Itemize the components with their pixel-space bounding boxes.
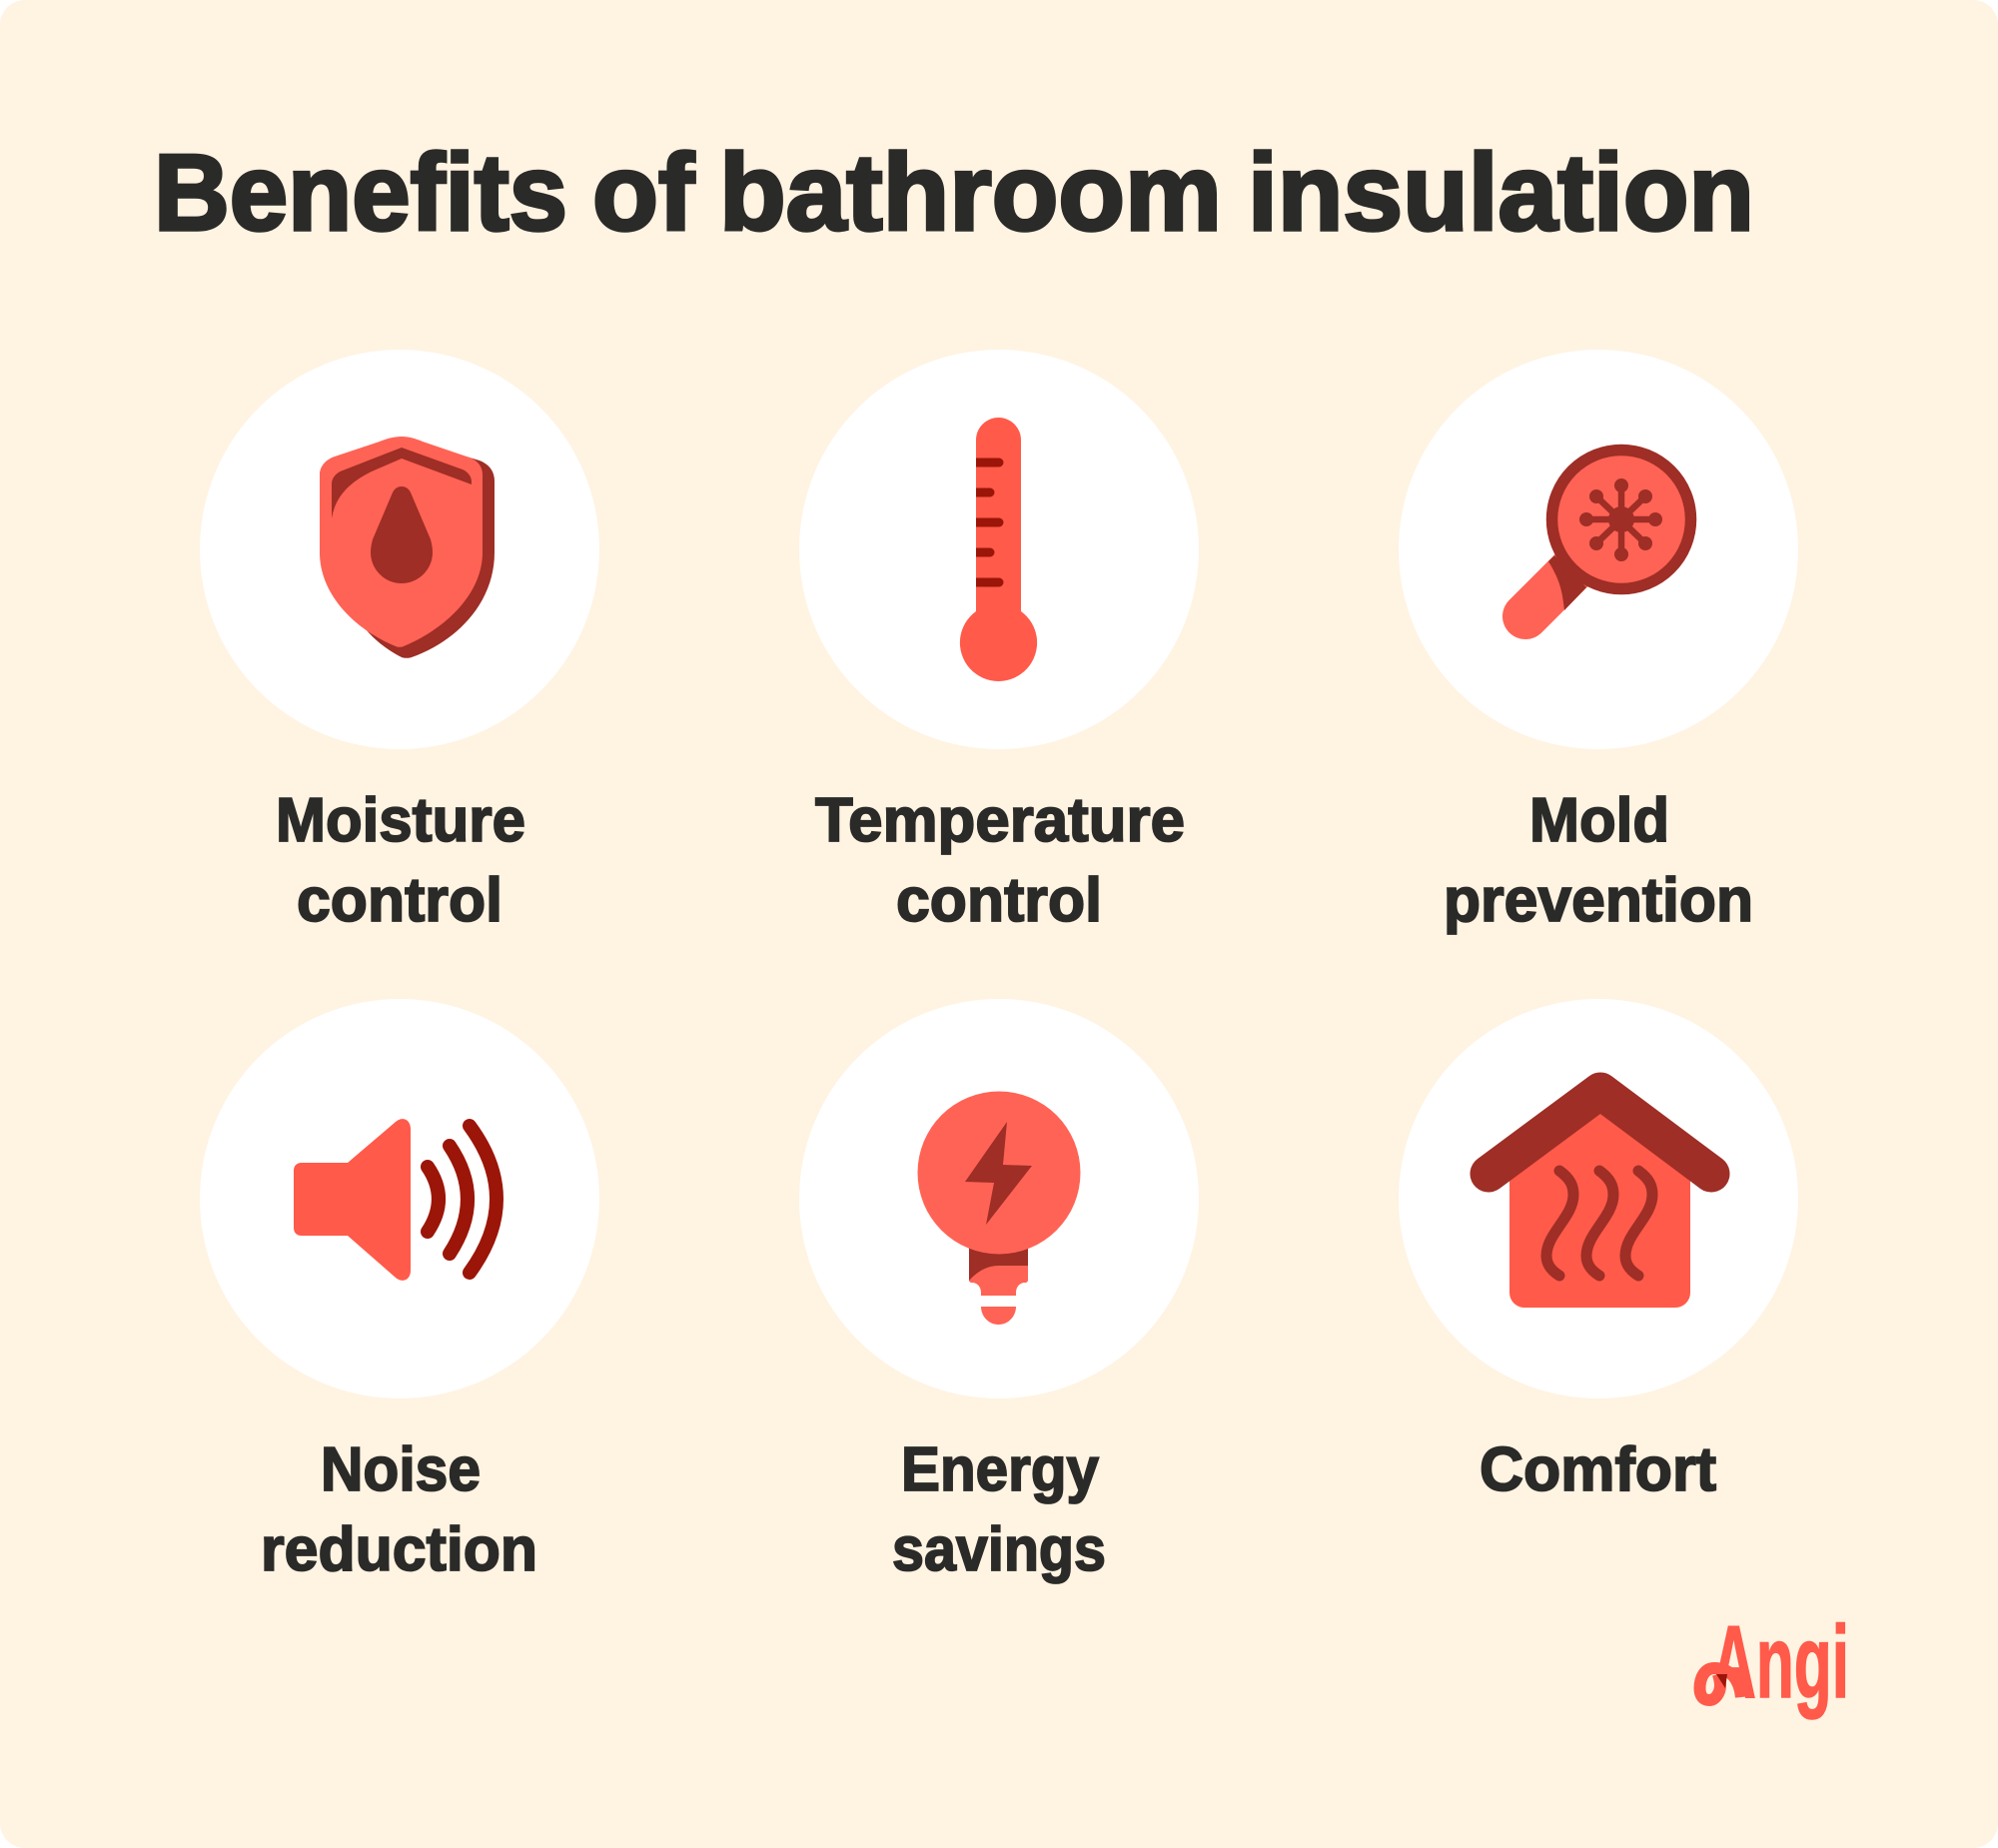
logo: Angi: Angi	[1711, 1604, 1849, 1719]
icon: house with heat waves	[1489, 1091, 1711, 1308]
label: energy savings: Energy	[901, 1435, 1099, 1504]
icon: shield with water drop	[320, 437, 495, 658]
label: moisture control: Moisture	[276, 786, 525, 855]
panel: moisture control	[200, 350, 599, 935]
icon circle: mold	[1399, 350, 1798, 749]
title	[154, 132, 1754, 254]
label: noise reduction: Noise	[321, 1435, 481, 1504]
label: mold prevention	[1444, 786, 1753, 935]
label: moisture control: control	[297, 866, 502, 935]
label: moisture control	[276, 786, 525, 935]
label: noise reduction	[261, 1435, 537, 1584]
icon circle: energy	[799, 999, 1199, 1398]
title: bathroom	[719, 132, 1222, 254]
label: noise reduction: reduction	[261, 1515, 537, 1584]
icon circle: comfort	[1399, 999, 1798, 1398]
icon circle: moisture	[200, 350, 599, 749]
icon circle: noise	[200, 999, 599, 1398]
panel: temperature control	[799, 350, 1199, 935]
icon circle: temperature	[799, 350, 1199, 749]
panel: mold prevention	[1399, 350, 1798, 935]
label: mold prevention: prevention	[1444, 866, 1753, 935]
title: Benefits	[154, 132, 567, 254]
icon: magnifying glass with mold spore	[1525, 450, 1690, 616]
panel: noise reduction	[200, 999, 599, 1584]
icon: thermometer	[960, 418, 1037, 681]
label: temperature control: control	[896, 866, 1102, 935]
title: insulation	[1248, 132, 1754, 254]
panel: comfort	[1399, 999, 1798, 1504]
icon: light bulb with lightning bolt	[917, 1091, 1081, 1325]
label: energy savings	[892, 1435, 1106, 1584]
logo: Angi	[1700, 1604, 1849, 1719]
icon: speaker with sound waves	[294, 1119, 497, 1281]
label: comfort: Comfort	[1480, 1435, 1716, 1504]
label: temperature control: Temperature	[815, 786, 1185, 855]
panel: energy savings	[799, 999, 1199, 1584]
label: energy savings: savings	[892, 1515, 1106, 1584]
label: mold prevention: Mold	[1529, 786, 1669, 855]
label: temperature control	[815, 786, 1185, 935]
title: of	[592, 132, 695, 254]
